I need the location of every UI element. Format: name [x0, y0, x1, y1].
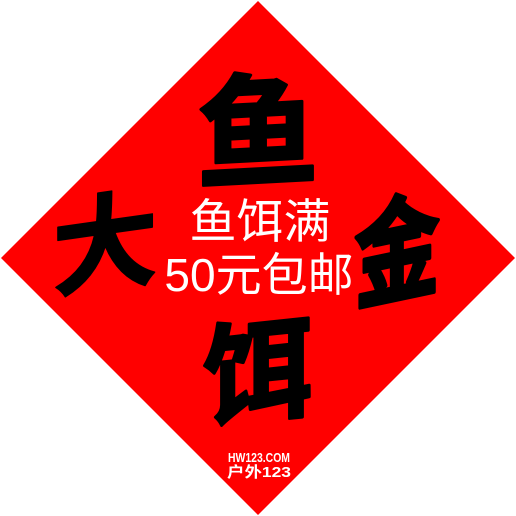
logo domain text: HW123.COM — [228, 450, 290, 465]
promo line: 50 yuan free shipping: 50元包邮 — [164, 249, 354, 301]
logo: HW123 — [227, 450, 291, 481]
calligraphy character: bait: 饵 — [203, 279, 313, 450]
calligraphy character: gold: 金 — [354, 152, 440, 335]
calligraphy character: big: 大 — [52, 151, 158, 320]
promo line: bait over: 鱼饵满 — [190, 195, 330, 248]
logo brand text: 户外123 — [227, 463, 291, 481]
calligraphy character: fish: 鱼 — [197, 32, 319, 215]
